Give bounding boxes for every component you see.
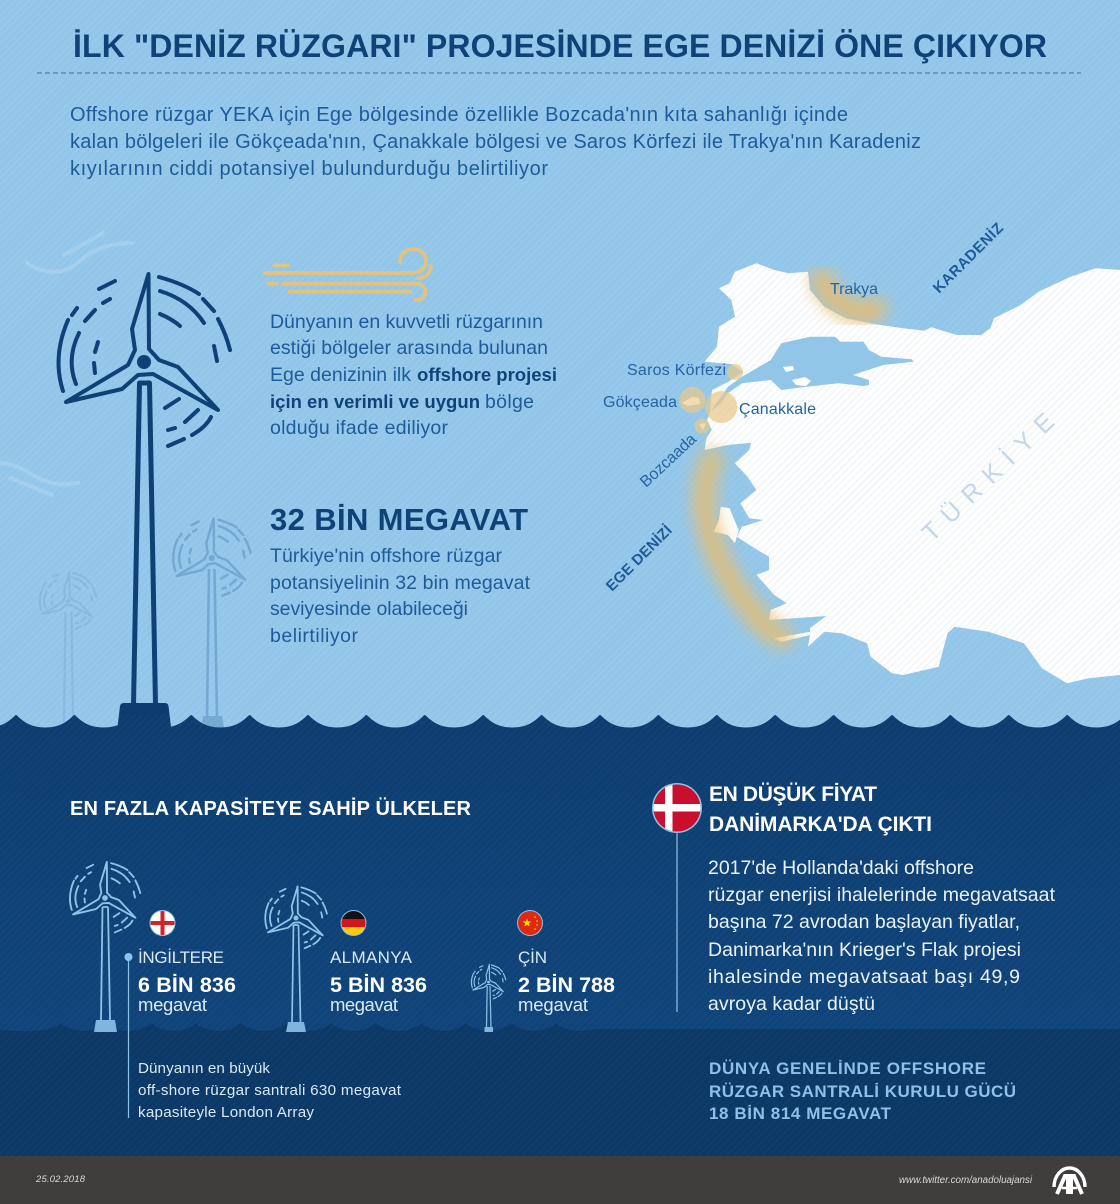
- map labels: TÜRKİYE: [916, 407, 1060, 547]
- England figures: 6 BİN 836: [138, 973, 236, 997]
- text block: strongest winds: olduğu ifade ediliyor: [270, 417, 448, 439]
- China figures: [518, 948, 615, 1015]
- text block: Denmark: ihalesinde megavatsaat başı 49,9: [708, 966, 1020, 988]
- sky background: [0, 0, 1120, 740]
- main turbine base: [117, 703, 172, 731]
- China turbine: [471, 964, 506, 1032]
- text block: Denmark: 2017'de Hollanda'daki offshore: [708, 857, 974, 879]
- London Array note: kapasiteyle London Array: [138, 1104, 314, 1121]
- England figures: [138, 948, 236, 1015]
- map labels: Çanakkale: [739, 401, 816, 418]
- text block: potential: Türkiye'nin offshore rüzgar: [270, 545, 502, 567]
- flag: Germany: [340, 910, 366, 936]
- England turbine: [70, 862, 140, 1032]
- heading: lowest price in Denmark: DANİMARKA'DA ÇIKTI: [709, 813, 932, 836]
- map labels: Trakya: [830, 281, 878, 298]
- map labels: Gökçeada: [603, 394, 677, 411]
- Germany turbine: [265, 886, 327, 1032]
- text block: strongest winds: offshore projesi: [417, 364, 557, 385]
- London Array note: off-shore rüzgar santrali 630 megavat: [138, 1082, 402, 1099]
- text block: potential: belirtiliyor: [270, 625, 358, 647]
- map labels: EGE DENİZİ: [603, 522, 676, 595]
- faint middle turbine: [173, 518, 250, 730]
- main turbine icon: [59, 274, 230, 705]
- heading: top capacity countries: EN FAZLA KAPASİTEYE SAHİP ÜLKELER: [70, 797, 472, 820]
- sea with waves: [0, 716, 1120, 1157]
- heading: 32 bin megavat: 32 BİN MEGAVAT: [270, 502, 528, 537]
- icon: agency logo: [1054, 1168, 1085, 1194]
- map labels: Bozcaada: [637, 431, 700, 491]
- flag: China: [517, 910, 543, 936]
- footer date: 25.02.2018: [35, 1174, 86, 1185]
- Aegean coast glow: [704, 460, 782, 637]
- wind icon: [264, 249, 431, 300]
- text block: potential: [270, 545, 531, 647]
- China figures: 2 BİN 788: [518, 973, 615, 997]
- map labels: [603, 220, 1060, 595]
- text block: strongest winds: bölge: [485, 391, 534, 413]
- map of Turkey: [705, 263, 1120, 683]
- text block: potential: potansiyelinin 32 bin megavat: [270, 572, 531, 594]
- callout: global installed capacity: 18 BİN 814 MEGAVAT: [709, 1104, 892, 1123]
- callout: global installed capacity: [709, 1059, 1016, 1123]
- text block: strongest winds: Dünyanın en kuvvetli rüzgarının: [270, 311, 543, 333]
- callout: global installed capacity: DÜNYA GENELİNDE OFFSHORE: [709, 1059, 986, 1078]
- stripe texture: [0, 0, 1120, 740]
- London Array note: [138, 1060, 402, 1121]
- China figures: ÇİN: [518, 948, 547, 967]
- intro paragraph: [70, 104, 921, 180]
- text block: strongest winds: estiği bölgeler arasında bulunan: [270, 337, 548, 359]
- stripe texture on sea: [0, 714, 1120, 1156]
- China figures: megavat: [518, 994, 588, 1015]
- text block: Denmark: [708, 857, 1056, 1015]
- Trakya glow: [822, 279, 876, 312]
- London Array callout line: [124, 953, 132, 1118]
- islands on highlighted circles: [682, 397, 706, 430]
- Germany figures: megavat: [330, 994, 398, 1015]
- text block: Denmark: Danimarka'nın Krieger's Flak projesi: [708, 939, 1021, 961]
- footer link: www.twitter.com/anadoluajansi: [899, 1175, 1033, 1186]
- Denmark flag with connector: [652, 783, 702, 1012]
- heading: lowest price in Denmark: EN DÜŞÜK FİYAT: [709, 783, 877, 806]
- Germany figures: ALMANYA: [330, 948, 413, 967]
- intro paragraph: Offshore rüzgar YEKA için Ege bölgesinde özellikle Bozcada'nın kıta sahanlığı içinde: [70, 104, 848, 126]
- wind streaks, lower left: [0, 463, 78, 495]
- intro paragraph: kıyılarının ciddi potansiyel bulundurduğu belirtiliyor: [70, 158, 548, 180]
- faint distant turbine: [40, 572, 96, 722]
- highlighted regions on the map: [680, 364, 743, 434]
- intro paragraph: kalan bölgeleri ile Gökçeada'nın, Çanakkale bölgesi ve Saros Körfezi ile Trakya'nın Karadeniz: [70, 131, 921, 153]
- text block: Denmark: başına 72 avrodan başlayan fiyatlar,: [708, 911, 1020, 933]
- footer bar: [0, 1156, 1120, 1204]
- text block: potential: seviyesinde olabileceği: [270, 598, 468, 620]
- text block: strongest winds: Ege denizinin ilk: [270, 364, 411, 386]
- map labels: KARADENİZ: [930, 220, 1007, 297]
- text block: strongest winds: [270, 311, 557, 439]
- England figures: İNGİLTERE: [138, 948, 224, 967]
- flag: England: [150, 910, 176, 936]
- text block: Denmark: avroya kadar düştü: [708, 993, 875, 1015]
- England figures: megavat: [138, 994, 207, 1015]
- heading: lowest price in Denmark: [709, 783, 932, 836]
- map labels: Saros Körfezi: [627, 362, 726, 379]
- text block: Denmark: rüzgar enerjisi ihalelerinde megavatsaat: [708, 884, 1056, 906]
- London Array note: Dünyanın en büyük: [138, 1060, 270, 1077]
- wind streaks, upper left: [27, 233, 132, 272]
- title: İLK "DENİZ RÜZGARI" PROJESİNDE EGE DENİZİ ÖNE ÇIKIYOR: [73, 28, 1047, 64]
- Germany figures: [330, 948, 427, 1015]
- callout: global installed capacity: RÜZGAR SANTRALİ KURULU GÜCÜ: [709, 1082, 1016, 1101]
- text block: strongest winds: için en verimli ve uygun: [270, 391, 480, 412]
- lower deep sea band: [0, 1023, 1120, 1156]
- Germany figures: 5 BİN 836: [330, 973, 427, 997]
